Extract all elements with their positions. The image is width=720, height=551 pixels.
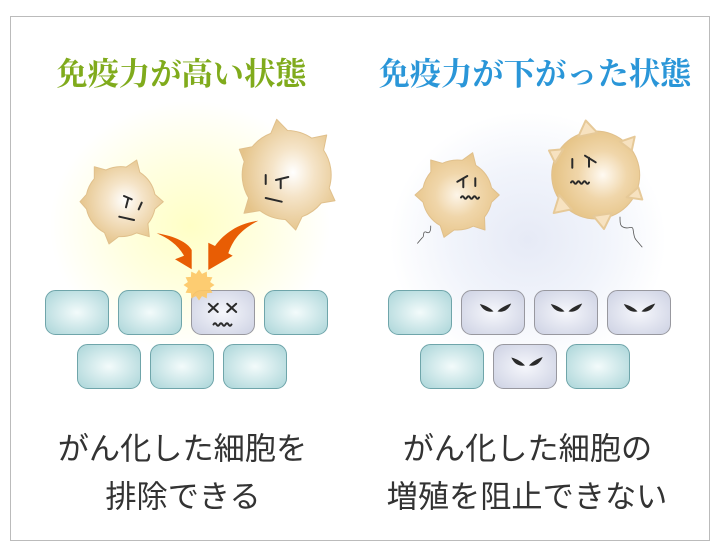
immune cell: small bbox=[80, 160, 163, 244]
immune cell: large bbox=[239, 119, 335, 230]
impact burst bbox=[184, 270, 214, 300]
arrow: left attack bbox=[157, 233, 192, 269]
blue glow background bbox=[390, 112, 666, 368]
cancer cell 4 bbox=[494, 344, 556, 388]
panel: lowered immunity bbox=[379, 56, 693, 514]
yellow glow background bbox=[50, 101, 330, 351]
heading: lowered immunity: 免疫力が下がった状態 bbox=[379, 56, 693, 92]
cancer cell 3 bbox=[608, 290, 670, 334]
panel: high immunity bbox=[46, 56, 335, 514]
caption: high immunity bbox=[58, 432, 307, 514]
normal cell bbox=[388, 290, 452, 334]
heading: high immunity: 免疫力が高い状態 bbox=[56, 56, 308, 92]
cancer cell 2 bbox=[534, 290, 598, 334]
caption: lowered immunity bbox=[387, 432, 667, 514]
normal cell row 2 left bbox=[420, 344, 484, 388]
arrow: right attack bbox=[208, 221, 258, 270]
cancer cells row 1 bbox=[46, 290, 328, 334]
dead cancer cell face bbox=[209, 304, 236, 326]
normal cell row 2 right bbox=[566, 344, 630, 388]
weak immune cell: large bbox=[549, 120, 642, 247]
weak immune cell: small bbox=[415, 153, 499, 244]
caption: lowered immunity: がん化した細胞の bbox=[403, 432, 652, 466]
caption: lowered immunity: 増殖を阻止できない bbox=[387, 480, 667, 514]
caption: high immunity: 排除できる bbox=[105, 480, 261, 514]
caption: high immunity: がん化した細胞を bbox=[58, 432, 307, 466]
normal cells row 2 bbox=[78, 344, 286, 388]
cancer cell 1 bbox=[462, 290, 524, 334]
